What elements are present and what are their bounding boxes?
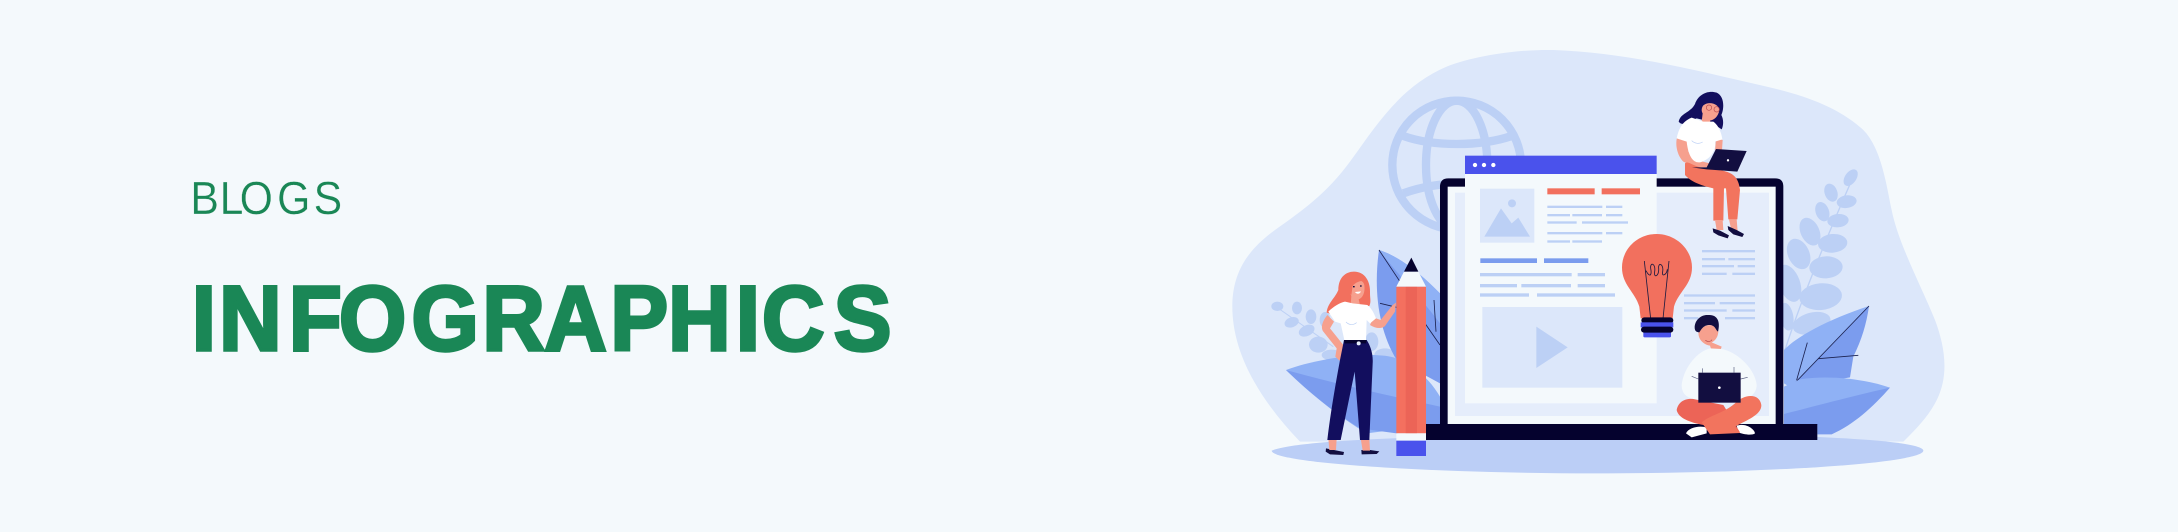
arms: [1676, 137, 1723, 167]
feet: [1715, 219, 1738, 232]
trousers: [1685, 162, 1740, 221]
ground ellipse: [1272, 434, 1923, 473]
sweater: [1682, 348, 1757, 400]
hair: [1695, 315, 1719, 332]
right upper leaf: [1784, 306, 1869, 387]
woman standing with pencil: [1322, 272, 1396, 455]
browser window: [1465, 156, 1657, 403]
blue heading bars: [1480, 258, 1588, 263]
shoes: [1686, 425, 1755, 437]
neck and face: [1350, 280, 1365, 305]
limbs: [1322, 303, 1396, 361]
smile: [1705, 340, 1712, 342]
pencil: [1396, 258, 1426, 456]
light bulb: [1622, 234, 1692, 337]
hair back: [1327, 272, 1370, 314]
video placeholder: [1482, 307, 1622, 388]
right sprig: [1773, 167, 1861, 350]
left upright leaf: [1377, 250, 1440, 383]
belt: [1344, 340, 1367, 343]
girl sitting on laptop: [1676, 92, 1747, 238]
hair: [1679, 92, 1723, 129]
shirt: [1328, 302, 1376, 340]
globe icon: [1392, 101, 1521, 229]
title: INFOGRAPHICS: INFOGRAPHICS: [192, 267, 891, 370]
facial features: [1353, 285, 1362, 287]
right lower leaf: [1784, 377, 1890, 434]
red heading bars: [1547, 188, 1640, 194]
laptop: [1692, 149, 1747, 172]
hair fringe: [1347, 279, 1365, 295]
trousers: [1327, 340, 1373, 440]
eyebrow: BLOGS: BLOGS: [190, 174, 342, 224]
upper text lines: [1547, 206, 1628, 243]
face: [1702, 103, 1719, 123]
browser title bar: [1465, 156, 1657, 174]
man sitting cross-legged: [1677, 315, 1761, 437]
image placeholder: [1480, 189, 1534, 243]
right screen text lines: [1684, 250, 1755, 319]
left sprig: [1271, 302, 1396, 362]
glasses: [1706, 105, 1719, 112]
shirt: [1677, 118, 1722, 162]
illustration: [1232, 50, 1944, 473]
laptop: [1698, 373, 1741, 403]
lower text lines: [1480, 273, 1615, 297]
background blob: [1232, 50, 1944, 442]
laptop: [1426, 178, 1817, 440]
crossed legs: [1677, 399, 1740, 433]
neck and face: [1698, 325, 1722, 352]
left lower leaf: [1286, 355, 1440, 433]
shoes: [1326, 448, 1379, 455]
